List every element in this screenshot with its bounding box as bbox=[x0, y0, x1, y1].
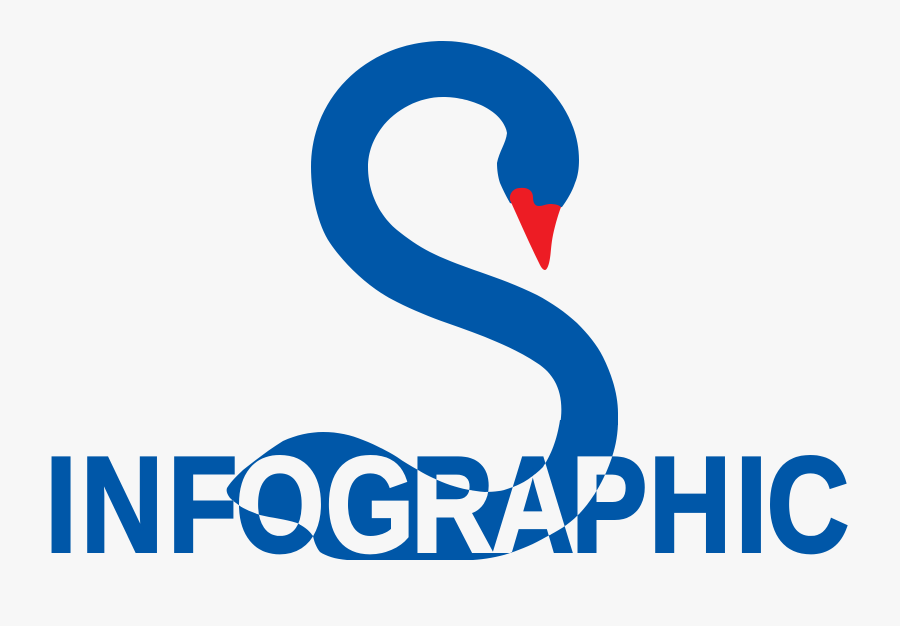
inverted wordmark inside body: INFOGRAPHIC bbox=[45, 428, 849, 581]
swan body bbox=[227, 420, 618, 560]
logo: swan with INFOGRAPHIC wordmark bbox=[52, 41, 848, 560]
wordmark text: INFOGRAPHIC bbox=[45, 428, 849, 581]
swan beak bbox=[510, 188, 561, 270]
swan neck and head bbox=[311, 41, 618, 425]
